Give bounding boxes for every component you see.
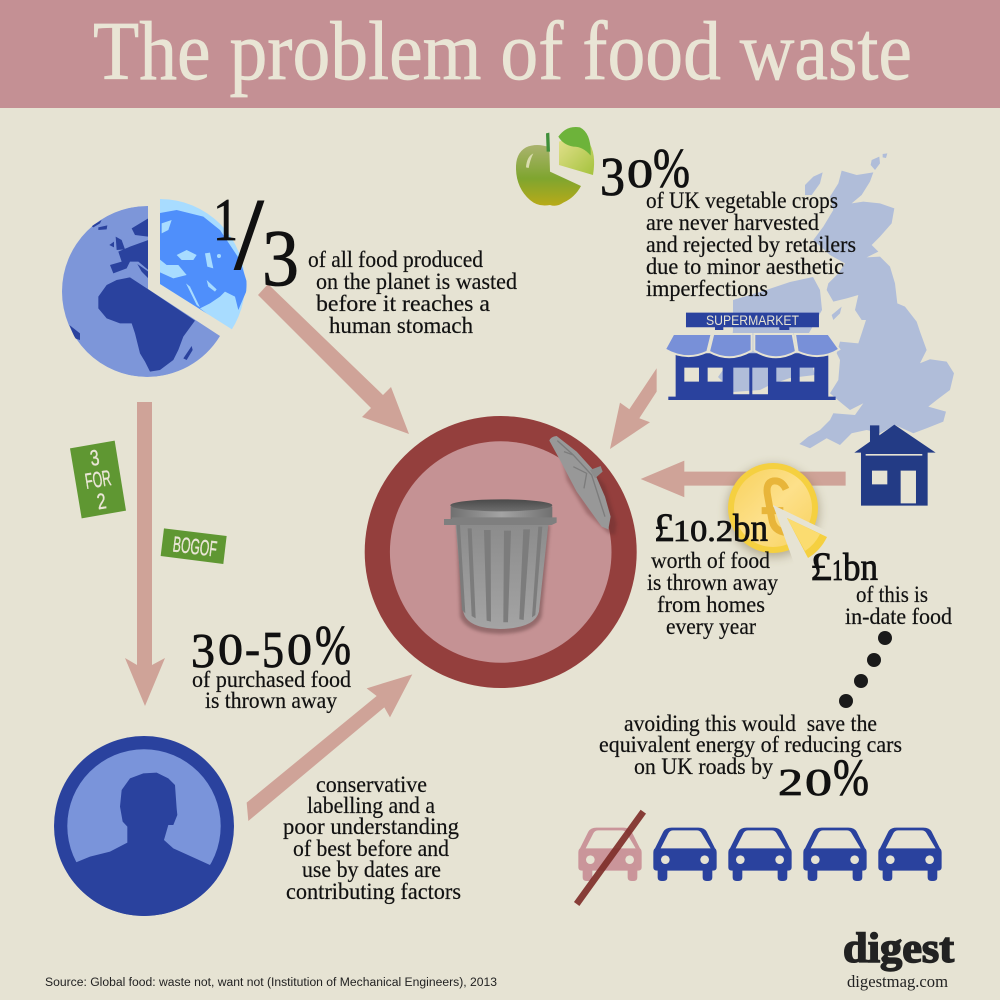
text: in-date food: in-date food (845, 604, 952, 630)
arrow: supermarket to bin (610, 368, 657, 449)
bin opening (450, 499, 552, 511)
stat: 10.2bn: 10.2 (673, 513, 733, 548)
text: avoiding this: equivalent energy of reducing cars (599, 732, 902, 758)
text: contributing factors: of best before and (293, 836, 449, 862)
arrow: person to bin (247, 674, 412, 821)
text: all food wasted: of all food produced (308, 247, 483, 273)
text: worth of food: from homes (657, 592, 765, 618)
stat: 1bn: £ (810, 544, 832, 589)
badge: 3 for 2 (70, 441, 126, 518)
text: contributing factors: labelling and a (307, 793, 436, 819)
icon: apple pie chart (516, 127, 594, 206)
person silhouette (68, 772, 218, 916)
text: vegetable crops: due to minor aesthetic (646, 254, 844, 280)
text: vegetable crops (646, 188, 856, 302)
strike-through line (577, 812, 643, 904)
text: worth of food: is thrown away (647, 570, 778, 596)
stat: one third: 3 (262, 215, 299, 303)
icon: dustbin (444, 499, 557, 634)
text: contributing factors: contributing factors (286, 879, 461, 905)
logo: digest: digest (843, 926, 954, 972)
badge: BOGOF (161, 528, 227, 564)
stat: 10.2bn: bn (733, 507, 768, 550)
stat: 30-50 percent: 0 (287, 625, 312, 674)
text: vegetable crops: and rejected by retailers (646, 232, 856, 258)
pie slice (787, 518, 827, 558)
stat: one third: / (235, 178, 264, 290)
logo: digest (843, 926, 954, 991)
icon: supermarket (665, 312, 839, 400)
blue car 1 (653, 828, 717, 881)
stat: 30 percent: % (653, 138, 690, 200)
text: purchased food: is thrown away (205, 688, 337, 714)
text: all food wasted: on the planet is wasted (316, 269, 517, 295)
apple leaf (558, 127, 591, 156)
icon: dustbin lid (549, 436, 617, 535)
bin body (456, 525, 548, 629)
stat: 20 percent: 2 (778, 762, 803, 804)
dotted connector (839, 631, 892, 708)
shop building (668, 353, 836, 400)
title: The problem of food waste (93, 5, 912, 98)
text: worth of food: every year (666, 614, 756, 640)
stat: 1bn: bn (843, 546, 878, 589)
website: digestmag.com (847, 972, 948, 991)
stat: 30-50 percent: 3 (191, 623, 215, 678)
pie gap (773, 505, 825, 570)
badge: 3 for 2: 3 (88, 445, 101, 471)
icon: supermarket: SUPERMARKET (706, 312, 799, 328)
stat: 30-50 percent: % (315, 615, 351, 677)
arrow: globe to bin (258, 284, 409, 434)
icon: house (854, 425, 936, 506)
icon: globe pie chart (62, 199, 248, 377)
stat: 20 percent: % (833, 750, 869, 807)
text: avoiding this (599, 711, 902, 780)
title banner (0, 0, 1000, 108)
badge: 3 for 2: FOR (83, 465, 113, 494)
pound sign (762, 481, 787, 533)
icon: person (54, 736, 234, 916)
stat: 30-50 percent: - (245, 625, 260, 674)
text: in-date food: of this is (856, 582, 928, 608)
arrow: home to bin (641, 461, 846, 497)
text: purchased food (192, 667, 351, 714)
text: vegetable crops: of UK vegetable crops (646, 188, 838, 214)
text: avoiding this: avoiding this would save the (624, 711, 877, 737)
text: in-date food (845, 582, 952, 630)
stat: one third (213, 178, 299, 303)
text: vegetable crops: imperfections (646, 276, 768, 302)
cars row (577, 812, 942, 904)
apple main slice (516, 145, 581, 206)
blue car 4 (878, 828, 942, 881)
source note: Source: Global food: waste not, want not (Institution of Mechanical Engineers), 2013 (45, 977, 497, 989)
text: all food wasted: before it reaches a (316, 291, 491, 317)
bin stripes (457, 525, 542, 622)
awning (665, 334, 839, 357)
stat: 30-50 percent: 5 (262, 622, 284, 679)
text: contributing factors: conservative (316, 772, 427, 798)
stat: 30-50 percent: 0 (218, 625, 243, 674)
stat: 20 percent: 0 (805, 762, 832, 804)
stat: 30 percent: 3 (600, 146, 625, 207)
arrow: globe to person (125, 402, 165, 706)
supermarket sign (686, 313, 819, 330)
text: worth of food: worth of food (651, 548, 770, 574)
crossed out car (578, 828, 642, 881)
bin rim (451, 507, 552, 520)
text: vegetable crops: are never harvested (646, 210, 819, 236)
blue car 2 (728, 828, 792, 881)
apple small slice (559, 139, 594, 175)
large globe slice (62, 206, 233, 377)
text: all food wasted (308, 247, 517, 339)
badge: 3 for 2: 2 (95, 488, 108, 514)
text: all food wasted: human stomach (329, 313, 473, 339)
text: purchased food: of purchased food (192, 667, 351, 693)
text: worth of food (647, 548, 778, 640)
text: avoiding this: on UK roads by (634, 754, 773, 780)
icon: pound coin (727, 463, 827, 570)
stat: 10.2bn: £ (654, 505, 674, 550)
text: contributing factors: poor understanding (283, 814, 459, 840)
apple stem (546, 133, 550, 152)
text: contributing factors: use by dates are (302, 857, 441, 883)
stat: 30 percent: 0 (627, 151, 653, 196)
text: contributing factors (283, 772, 461, 905)
badge: BOGOF: BOGOF (172, 531, 218, 562)
stat: one third: 1 (213, 187, 238, 253)
small globe slice (160, 199, 247, 330)
blue car 3 (803, 828, 867, 881)
map: United Kingdom and Ireland (718, 153, 954, 448)
stat: 1bn: 1 (832, 554, 843, 587)
bin circle (365, 416, 637, 688)
